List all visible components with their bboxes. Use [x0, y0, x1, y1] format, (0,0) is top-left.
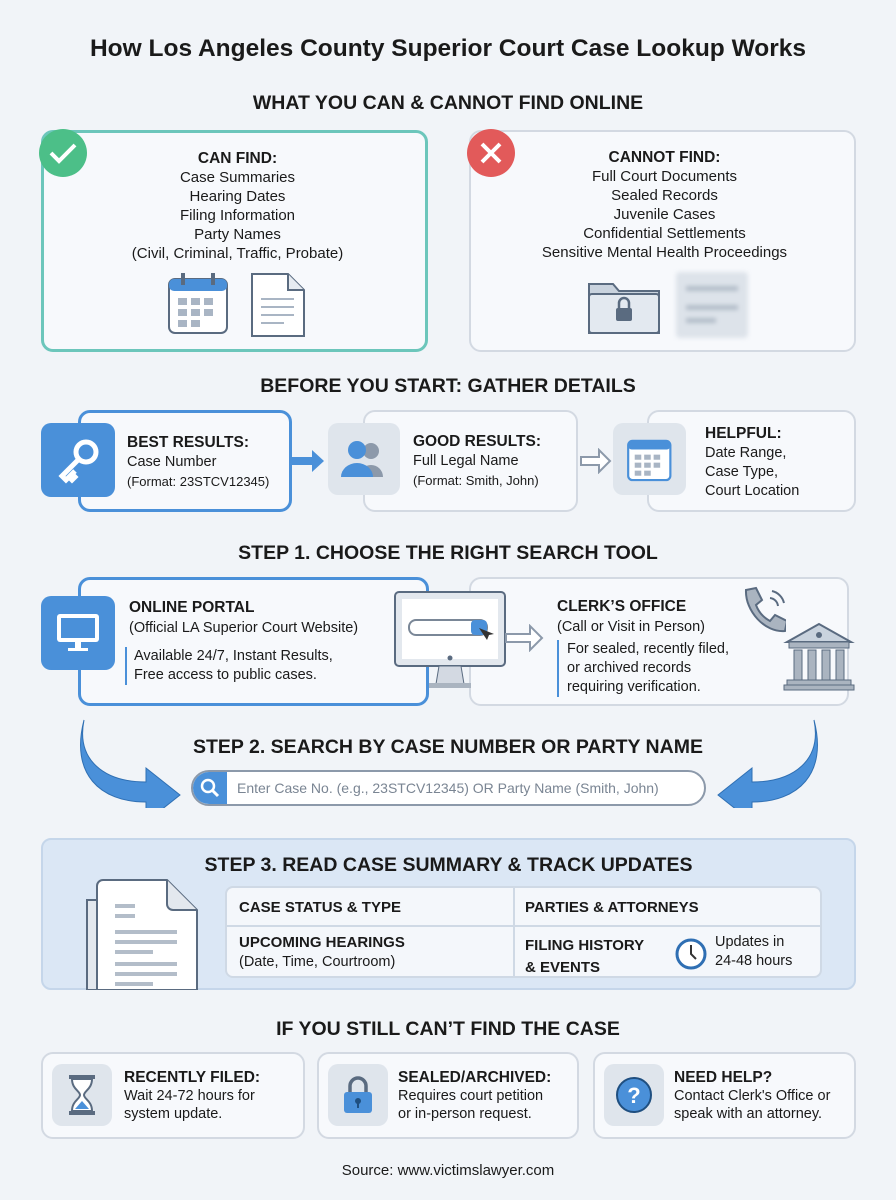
text: clerk detail: or archived records [567, 660, 691, 676]
text: SEALED/ARCHIVED: [398, 1069, 551, 1086]
text: RECENTLY FILED: [124, 1069, 260, 1086]
text: cannot find list: Sensitive Mental Health Proceedings [542, 244, 787, 261]
icon: monitor [41, 596, 115, 670]
icon: magnifier [193, 772, 227, 804]
text: good results: (Format: Smith, John) [413, 473, 539, 488]
icon: people [328, 423, 400, 495]
card: good results [363, 410, 578, 512]
text: good results: GOOD RESULTS: [413, 433, 541, 450]
text: helpful: HELPFUL: [705, 425, 782, 442]
text: best results: BEST RESULTS: [127, 434, 249, 451]
text: cannot find list: CANNOT FIND: [609, 149, 720, 166]
cell: upcoming hearings [239, 934, 405, 970]
text: can find list: CAN FIND: [198, 150, 277, 167]
text: can find list: Filing Information [180, 207, 295, 224]
text: clerk office [557, 598, 705, 635]
heading: step 2: STEP 2. SEARCH BY CASE NUMBER OR PARTY NAME [193, 736, 703, 758]
icon: key [41, 423, 115, 497]
text: online portal: ONLINE PORTAL [129, 599, 254, 616]
arrow: to clerk [505, 624, 544, 652]
search bar [191, 770, 706, 806]
heading: before you start: BEFORE YOU START: GATHER DETAILS [260, 375, 636, 397]
text: helpful [705, 425, 799, 499]
text: good results [413, 433, 541, 488]
text: Contact Clerk's Office or [674, 1088, 830, 1104]
text: online portal detail [125, 647, 333, 685]
heading: still can't find: IF YOU STILL CAN’T FIND THE CASE [276, 1018, 620, 1040]
text: good results: Full Legal Name [413, 453, 519, 469]
text: can find list: (Civil, Criminal, Traffic, Probate) [132, 245, 343, 262]
text: clerk office: CLERK’S OFFICE [557, 598, 686, 615]
text: cannot find list: Full Court Documents [592, 168, 737, 185]
text: search placeholder: Enter Case No. (e.g., 23STCV12345) OR Party Name (Smith, John) [237, 780, 659, 796]
text: best results: Case Number [127, 454, 216, 470]
text: updates: 24-48 hours [715, 953, 792, 969]
text: updates [715, 934, 792, 969]
text [124, 1069, 260, 1122]
card: clerk's office [469, 577, 849, 706]
card: best results [78, 410, 292, 512]
card: recently filed [41, 1052, 305, 1139]
panel: cannot find [469, 130, 856, 352]
text [398, 1069, 551, 1122]
cell: filing history: & EVENTS [525, 959, 600, 976]
text: cannot find list: Confidential Settlements [583, 225, 746, 242]
text: NEED HELP? [674, 1069, 772, 1086]
heading: step 1: STEP 1. CHOOSE THE RIGHT SEARCH TOOL [238, 542, 658, 564]
heading: can/cannot: WHAT YOU CAN & CANNOT FIND ONLINE [253, 92, 643, 114]
icon: question: ? [627, 1083, 641, 1108]
cell: filing history: FILING HISTORY [525, 937, 644, 954]
cell: case status: CASE STATUS & TYPE [239, 899, 401, 916]
text: can find list: Case Summaries [180, 169, 295, 186]
card: helpful [647, 410, 856, 512]
arrow: blue [292, 450, 324, 472]
text: cannot find list: Juvenile Cases [614, 206, 715, 223]
text: clerk detail: requiring verification. [567, 679, 701, 695]
arrow: curved left [80, 720, 181, 808]
icon: search monitor [394, 591, 506, 688]
icon: blurred document [676, 272, 748, 338]
text: cannot find list: Sealed Records [611, 187, 718, 204]
cell: filing history [525, 937, 644, 976]
text: clerk detail [557, 640, 729, 697]
text: best results [127, 434, 269, 489]
arrow: outline [580, 448, 612, 474]
text: clerk detail: For sealed, recently filed, [567, 641, 729, 657]
text: can find list: Party Names [194, 226, 281, 243]
cell: parties: PARTIES & ATTORNEYS [525, 899, 699, 916]
text: or in-person request. [398, 1106, 532, 1122]
text: Requires court petition [398, 1088, 543, 1104]
text: helpful: Case Type, [705, 464, 778, 480]
text: online portal detail: Free access to public cases. [134, 667, 317, 683]
icon: document [251, 273, 305, 337]
text: Wait 24-72 hours for [124, 1088, 255, 1104]
cell: upcoming hearings: (Date, Time, Courtroom) [239, 954, 395, 970]
panel: can find [41, 130, 428, 352]
text: best results: (Format: 23STCV12345) [127, 474, 269, 489]
table: summary fields [225, 886, 822, 978]
text [674, 1069, 830, 1122]
card: sealed/archived [317, 1052, 579, 1139]
icon: check [39, 129, 87, 177]
text: system update. [124, 1106, 222, 1122]
text: online portal [129, 599, 358, 636]
icon: question [604, 1064, 664, 1126]
title: How Los Angeles County Superior Court Case Lookup Works [90, 35, 806, 62]
cell: upcoming hearings: UPCOMING HEARINGS [239, 934, 405, 951]
text: online portal detail: Available 24/7, Instant Results, [134, 648, 333, 664]
text: cannot find list [542, 149, 787, 261]
icon: calendar small [613, 423, 686, 495]
card: online portal [78, 577, 429, 706]
icon: hourglass [52, 1064, 112, 1126]
icon: calendar [168, 273, 228, 334]
icon: document stack [86, 879, 198, 990]
text: updates: Updates in [715, 934, 784, 950]
text: helpful: Court Location [705, 483, 799, 499]
text: can find list: Hearing Dates [190, 188, 285, 205]
heading: step 3: STEP 3. READ CASE SUMMARY & TRACK UPDATES [205, 854, 692, 876]
card: need help [593, 1052, 856, 1139]
text: helpful: Date Range, [705, 445, 786, 461]
footer: source: Source: www.victimslawyer.com [342, 1162, 554, 1179]
arrow: curved right [717, 720, 818, 808]
icon: locked folder [588, 283, 660, 334]
icon: courthouse [783, 622, 855, 690]
icon: phone [744, 586, 786, 632]
icon: lock [328, 1064, 388, 1126]
text: clerk office: (Call or Visit in Person) [557, 619, 705, 635]
text: can find list [132, 150, 343, 262]
icon: x [467, 129, 515, 177]
panel: step 3 [41, 838, 856, 990]
text: speak with an attorney. [674, 1106, 822, 1122]
text: online portal: (Official LA Superior Court Website) [129, 620, 358, 636]
icon: clock [676, 938, 706, 970]
